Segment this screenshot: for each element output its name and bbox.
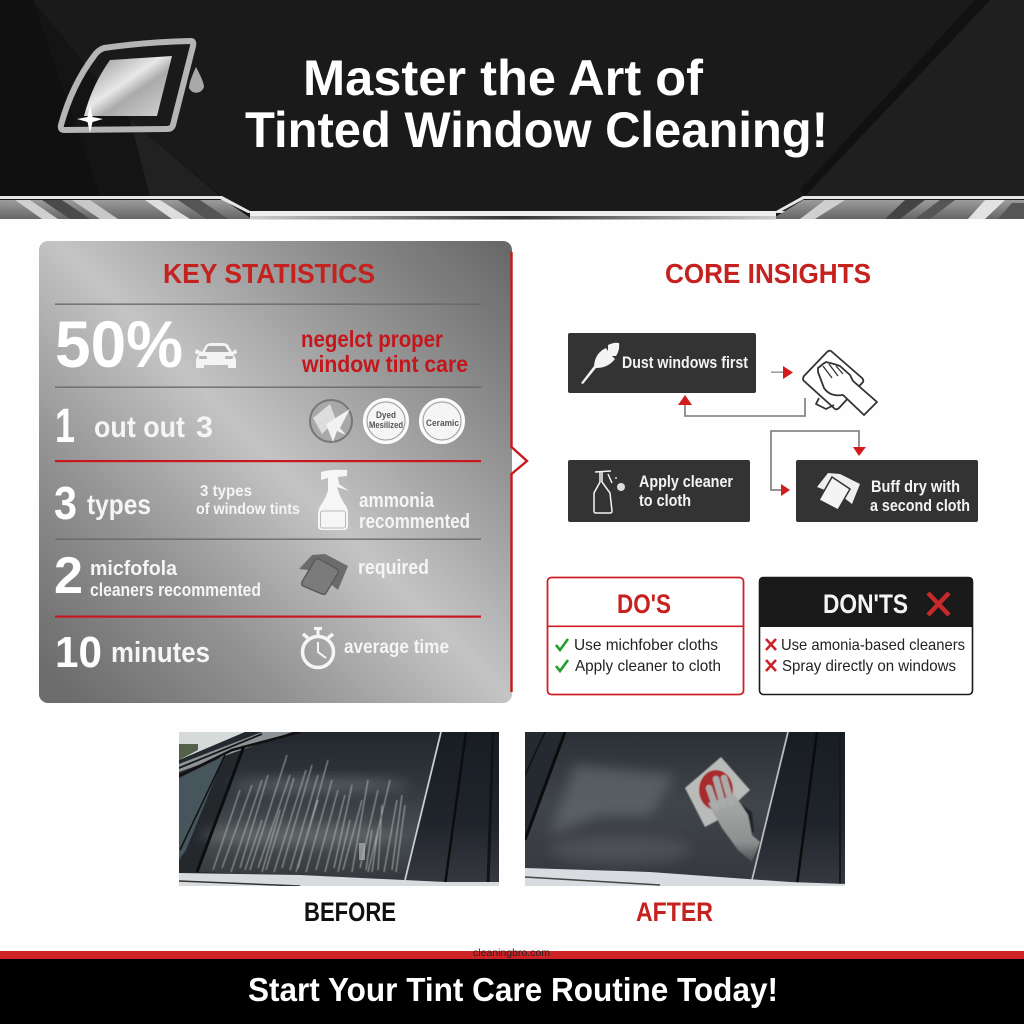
stat text: average time: average time: [344, 637, 449, 658]
panel: key statistics: minutes: [111, 637, 210, 669]
stat: 50 percent: 50%: [55, 307, 183, 381]
panel: key statistics: recommented: [359, 511, 470, 533]
icon: tint badge: [310, 400, 352, 442]
watermark: cleaningbro.com: [473, 948, 550, 959]
badge: ceramic: Ceramic: [426, 418, 459, 429]
title: Tinted Window Cleaning!: [245, 102, 828, 158]
panel: key statistics: cleaners recommented: [90, 580, 261, 600]
stat: 10 minutes: 10: [55, 628, 102, 677]
icon: window with sparkle and drop: [61, 41, 204, 133]
step: apply cleaner to cloth: Apply cleaner: [639, 472, 733, 491]
panel: key statistics: 3 types: [200, 483, 252, 500]
step: dust windows first: Dust windows first: [622, 354, 748, 372]
panel: do's: [548, 578, 744, 694]
icon: red cross: [928, 593, 949, 615]
badge: dyed metallized: [364, 399, 408, 443]
heading: core insights: CORE INSIGHTS: [665, 258, 871, 289]
panel: key statistics: 3: [196, 411, 213, 444]
photo: after, hand wiping clean window: [525, 732, 846, 886]
stat text: required: required: [358, 557, 429, 579]
list item: apply cleaner to cloth: Apply cleaner to cloth: [575, 658, 721, 675]
icon: stopwatch: [302, 627, 334, 668]
badge: dyed metallized: Mesilized: [369, 420, 403, 430]
silver band centre: [250, 211, 776, 216]
header banner: [0, 0, 1024, 220]
call to action: Start Your Tint Care Routine Today!: [248, 971, 778, 1008]
icon: microfiber cloths: [299, 554, 348, 594]
stat: 2 microfiber: 2: [54, 547, 83, 605]
step: buff dry with a second cloth: Buff dry with: [871, 477, 960, 496]
water streaks: [213, 755, 405, 872]
footer banner: [0, 948, 1024, 1024]
panel: don'ts: [759, 577, 973, 694]
heading: do's: DO'S: [617, 589, 671, 619]
connector: to buff dry: [771, 431, 866, 496]
step: apply cleaner to cloth: to cloth: [639, 491, 691, 510]
panel: key statistics: micfofola: [90, 558, 178, 580]
label: after: AFTER: [636, 897, 713, 927]
glass reflections: [550, 765, 690, 864]
panel: key statistics: out out: [94, 411, 185, 444]
step: buff dry with a second cloth: a second cloth: [870, 496, 970, 515]
sill: [525, 868, 846, 886]
title: Master the Art of: [303, 50, 703, 106]
icon: hand wiping with cloth: [803, 351, 877, 415]
icon: spray bottle: [318, 470, 349, 530]
stat: 1 out of 3: 1: [55, 400, 75, 453]
stat: 3 types: 3: [54, 477, 77, 529]
panel: key statistics: types: [87, 489, 151, 520]
window frame lines: [525, 732, 565, 840]
stat text: ammonia recommended: ammonia: [359, 490, 435, 512]
icon: car: [195, 343, 237, 368]
step: dust windows first: [568, 333, 756, 393]
label: before: BEFORE: [304, 897, 396, 927]
arrow: dust to wipe: [771, 366, 793, 379]
step: apply cleaner to cloth: [568, 460, 750, 522]
heading: key statistics: KEY STATISTICS: [163, 258, 375, 289]
flow diagram: core insights steps: [568, 333, 978, 522]
panel: key statistics: window tint care: [301, 351, 468, 377]
badge: dyed metallized: Dyed: [376, 410, 396, 420]
badge: ceramic: [420, 399, 464, 443]
silver band right: [772, 200, 1024, 219]
panel: key statistics: of window tints: [196, 501, 300, 518]
stat text: neglect proper care: negelct proper: [301, 326, 443, 352]
photo: before, streaked window: [179, 732, 500, 886]
title: [245, 50, 828, 158]
window frame lines: [179, 732, 292, 772]
list item: use ammonia cleaners: Use amonia-based cleaners: [781, 637, 965, 654]
list item: spray directly on windows: Spray directly on windows: [782, 658, 956, 675]
list item: use microfiber cloths: Use michfober cloths: [574, 637, 718, 654]
heading: don'ts: DON'TS: [823, 589, 908, 619]
streak reflections: [200, 778, 410, 845]
connector: wipe back to dust: [678, 395, 805, 416]
panel pointer outline: [512, 252, 527, 692]
panel: key statistics: [39, 241, 527, 703]
silver band left: [0, 196, 1024, 219]
cloth and hand: [685, 757, 760, 862]
step: buff dry with a second cloth: [796, 460, 978, 522]
